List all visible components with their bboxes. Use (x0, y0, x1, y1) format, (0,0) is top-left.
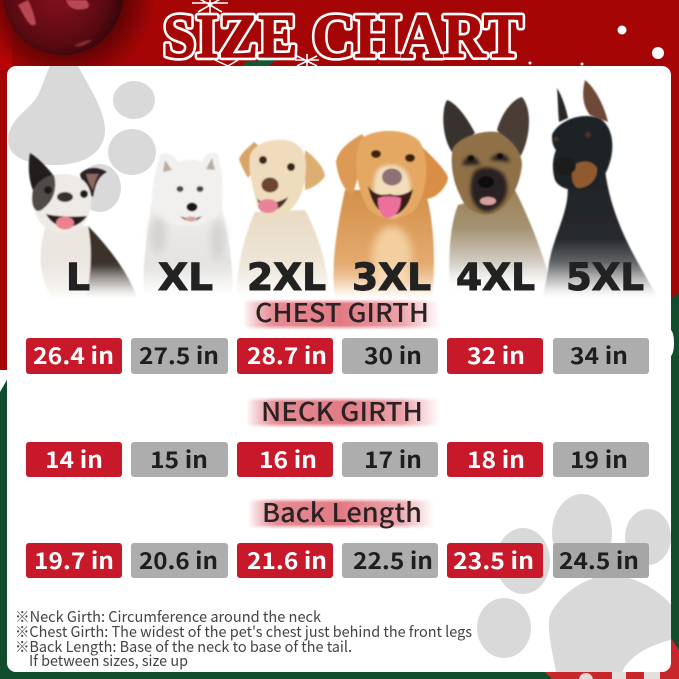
dogs row (8, 80, 668, 300)
size labels: 4XL (456, 256, 535, 299)
section: neck girth: 18 in (467, 441, 525, 475)
section: back length: 21.6 in (247, 542, 327, 576)
section: neck girth: 16 in (259, 441, 317, 475)
paw print: top left (8, 66, 156, 212)
section: chest girth: 32 in (467, 337, 525, 371)
dog: golden retriever (333, 131, 448, 298)
section: chest girth: 26.4 in (33, 337, 114, 371)
section: back length: 22.5 in (353, 542, 433, 576)
footnotes (15, 606, 472, 671)
ornament: red bauble top left (0, 0, 156, 86)
ornament: red bauble bottom right (545, 638, 679, 679)
section: chest girth: 30 in (364, 337, 422, 371)
section: back length: 24.5 in (559, 542, 639, 576)
section: back length: Back Length (262, 493, 422, 530)
footnotes: ※Neck Girth: Circumference around the neck (15, 606, 322, 627)
section: chest girth: 28.7 in (247, 337, 327, 371)
size labels: L (66, 256, 90, 299)
section: chest girth: 27.5 in (139, 337, 219, 371)
dog: german shepherd (443, 97, 552, 290)
size labels (66, 256, 644, 299)
section: back length: 20.6 in (139, 542, 218, 576)
size labels: XL (158, 256, 213, 299)
section: neck girth: 14 in (45, 441, 103, 475)
section: neck girth (26, 392, 649, 477)
section: back length: 23.5 in (453, 542, 534, 576)
footnotes: ※Chest Girth: The widest of the pet's chest just behind the front legs (15, 621, 472, 642)
dog: boston terrier (29, 153, 137, 298)
paw print: bottom right (477, 494, 671, 672)
section: neck girth: 19 in (570, 441, 628, 475)
section: chest girth: CHEST GIRTH (255, 293, 429, 330)
size labels: 3XL (352, 256, 431, 299)
section: neck girth: NECK GIRTH (261, 392, 423, 429)
white fade under dogs (8, 262, 668, 300)
dog: samoyed (144, 152, 232, 298)
section: back length: 19.7 in (34, 542, 114, 576)
footnotes: If between sizes, size up (29, 650, 188, 671)
section: chest girth: 34 in (570, 337, 628, 371)
section: chest girth (26, 293, 649, 374)
section: neck girth: 17 in (364, 441, 422, 475)
section: neck girth: 15 in (150, 441, 208, 475)
dog: labrador (237, 140, 329, 298)
dog: doberman (543, 80, 658, 298)
decorations: snowflakes and dots (192, 0, 664, 68)
title: size chart: SIZE CHART (163, 3, 523, 71)
footnotes: ※Back Length: Base of the neck to base of the tail. (15, 636, 352, 657)
size labels: 2XL (247, 256, 326, 299)
section: back length (26, 493, 649, 578)
size labels: 5XL (566, 256, 644, 299)
title: size chart: SIZE CHART (163, 3, 523, 71)
